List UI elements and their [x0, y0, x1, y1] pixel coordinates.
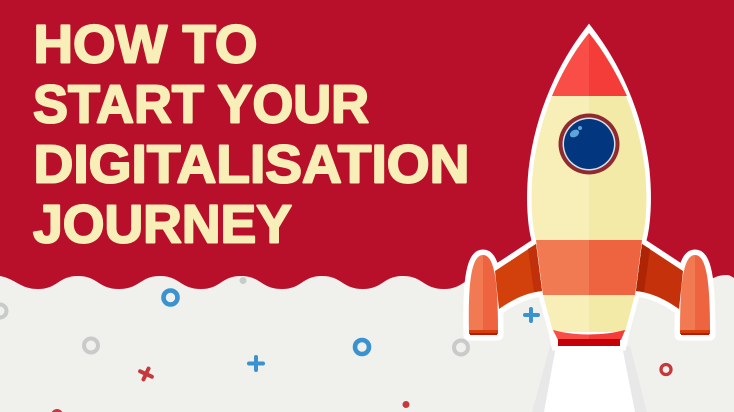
title: DIGITALISATION [34, 134, 470, 194]
white outline of fins and wings [469, 244, 710, 335]
white outline of body [532, 31, 646, 346]
blue ring top [164, 290, 178, 304]
window [558, 114, 620, 174]
red header with wavy edge [0, 0, 734, 289]
blue plus centre [249, 357, 263, 370]
title: JOURNEY [33, 194, 292, 254]
right wing [636, 244, 683, 309]
red dot [402, 401, 410, 408]
grey ring left edge [0, 304, 6, 318]
decorative confetti [0, 277, 671, 412]
nozzle [553, 330, 625, 346]
grey dot [240, 277, 246, 284]
grey ring near rocket [454, 340, 468, 354]
title: HOW TO [34, 14, 258, 74]
exhaust flame [532, 346, 647, 412]
grey ring [84, 338, 98, 352]
left wing [495, 244, 542, 309]
rocket [469, 31, 710, 412]
red cross [138, 366, 154, 382]
rocket body [532, 33, 646, 332]
title: START YOUR [33, 74, 369, 134]
red dot bottom edge [51, 409, 63, 412]
left fin [469, 255, 498, 335]
blue plus near fin [525, 309, 538, 321]
blue ring centre [355, 340, 369, 354]
title [33, 14, 470, 254]
right fin [680, 255, 710, 335]
red ring right [661, 364, 671, 374]
